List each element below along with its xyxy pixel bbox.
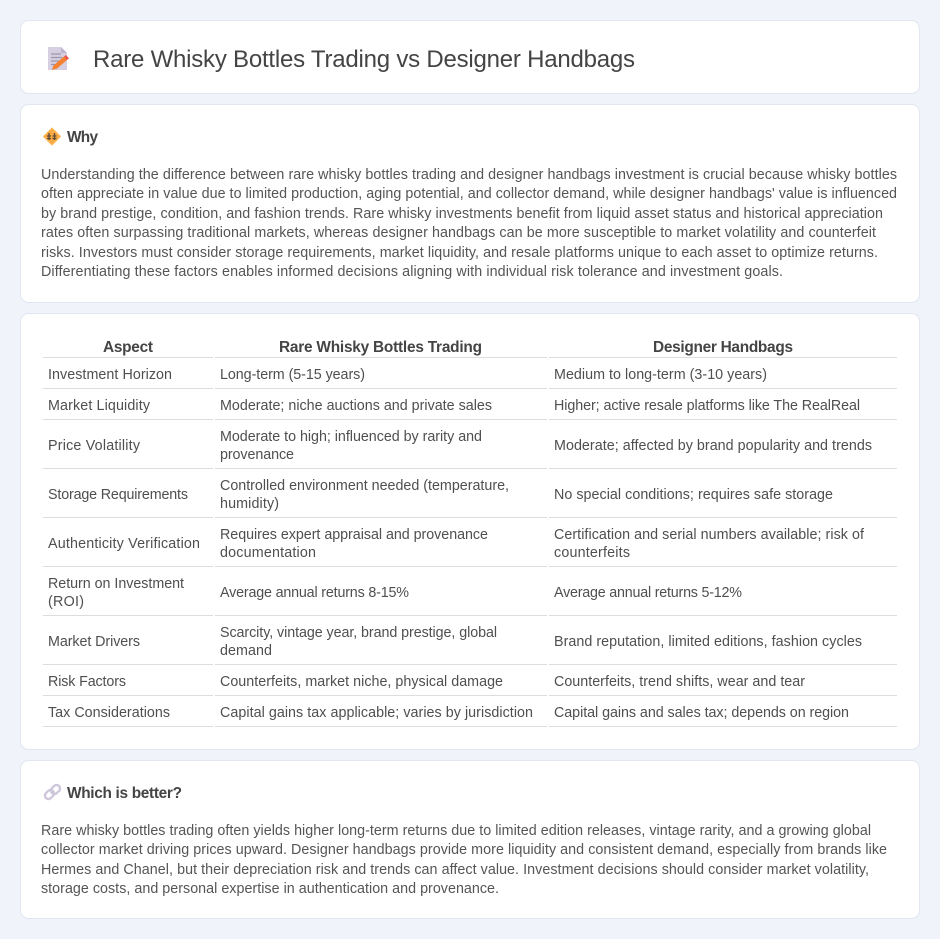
- icon: chain link: [43, 783, 62, 801]
- row: price volatility: Price Volatility: [48, 438, 141, 454]
- panel: comparison table: [20, 314, 920, 750]
- row: return on investment: [43, 576, 897, 616]
- row: market drivers: Brand reputation, limited editions, fashion cycles: [554, 634, 862, 650]
- icon: warning diamond: [44, 128, 60, 145]
- row: risk factors: Counterfeits, market niche, physical damage: [220, 674, 503, 690]
- heading: which is better: Which is better?: [67, 785, 182, 802]
- row: investment horizon: [43, 367, 897, 389]
- row: tax considerations: Capital gains and sales tax; depends on region: [554, 705, 849, 721]
- row: storage requirements: [43, 478, 897, 518]
- text block: why explanation: Understanding the difference between rare whisky bottles trading and designer handbags investment is crucial because whisky bottles: [41, 167, 897, 183]
- text block: verdict: [41, 823, 887, 897]
- row: market liquidity: Market Liquidity: [48, 398, 151, 414]
- row: authenticity verification: Authenticity Verification: [48, 536, 200, 552]
- table header row: Designer Handbags: [653, 339, 793, 356]
- heading: why: Why: [67, 129, 98, 146]
- text block: why explanation: rates often surpassing traditional markets, whereas designer handbags can be more susceptible to market volatility and counterfeit: [41, 225, 876, 241]
- panel: title header: [20, 20, 920, 94]
- row: authenticity verification: documentation: [220, 545, 316, 561]
- row: authenticity verification: [43, 527, 897, 567]
- row: tax considerations: Capital gains tax applicable; varies by jurisdiction: [220, 705, 533, 721]
- row: market liquidity: Higher; active resale platforms like The RealReal: [554, 398, 860, 414]
- table header row: Aspect: [103, 339, 153, 356]
- row: return on investment: (ROI): [48, 594, 84, 610]
- text block: verdict: collector market driving prices upward. Designer handbags provide more liquidity and consistent demand, especially from brands like: [41, 842, 887, 858]
- row: storage requirements: Storage Requirements: [48, 487, 188, 503]
- text block: why explanation: [41, 167, 897, 280]
- text block: why explanation: risks. Investors must consider storage requirements, market liquidity, and resale platforms unique to each asset to optimize returns.: [41, 245, 878, 261]
- table header row: Rare Whisky Bottles Trading: [279, 339, 482, 356]
- row: investment horizon: Long-term (5-15 years): [220, 367, 365, 383]
- icon: memo with pencil: [48, 47, 69, 70]
- row: storage requirements: humidity): [220, 496, 279, 512]
- row: market drivers: Market Drivers: [48, 634, 140, 650]
- row: market liquidity: [43, 398, 897, 420]
- row: storage requirements: Controlled environment needed (temperature,: [220, 478, 509, 494]
- row: price volatility: Moderate to high; influenced by rarity and: [220, 429, 482, 445]
- text block: verdict: Hermes and Chanel, but their depreciation risk and trends can affect value. Investment decisions should consider market volatility,: [41, 862, 869, 878]
- row: market liquidity: Moderate; niche auctions and private sales: [220, 398, 492, 414]
- text block: why explanation: often appreciate in value due to limited production, aging potential, and collector demand, while designer handbags' value is influenced: [41, 186, 897, 202]
- row: authenticity verification: counterfeits: [554, 545, 630, 561]
- row: investment horizon: Investment Horizon: [48, 367, 172, 383]
- row: price volatility: Moderate; affected by brand popularity and trends: [554, 438, 872, 454]
- row: return on investment: Average annual returns 8-15%: [220, 585, 409, 601]
- row: risk factors: Counterfeits, trend shifts, wear and tear: [554, 674, 805, 690]
- row: market drivers: Scarcity, vintage year, brand prestige, global: [220, 625, 497, 641]
- row: risk factors: Risk Factors: [48, 674, 126, 690]
- row: price volatility: [43, 429, 897, 469]
- panel: which is better: [20, 760, 920, 918]
- text block: why explanation: by brand prestige, condition, and fashion trends. Rare whisky investments benefit from liquid asset status and historical appreciation: [41, 206, 883, 222]
- row: tax considerations: Tax Considerations: [48, 705, 170, 721]
- panel: why: [20, 104, 920, 302]
- row: storage requirements: No special conditions; requires safe storage: [554, 487, 833, 503]
- text block: verdict: Rare whisky bottles trading often yields higher long-term returns due to limited edition releases, vintage rarity, and a growing global: [41, 823, 871, 839]
- text block: why explanation: Differentiating these factors enables informed decisions aligning with individual risk tolerance and investment goals.: [41, 264, 783, 280]
- row: market drivers: [43, 625, 897, 665]
- row: market drivers: demand: [220, 643, 272, 659]
- row: authenticity verification: Certification and serial numbers available; risk of: [554, 527, 864, 543]
- row: return on investment: Return on Investment: [48, 576, 184, 592]
- row: price volatility: provenance: [220, 447, 294, 463]
- text block: verdict: storage costs, and personal expertise in authentication and provenance.: [41, 881, 499, 897]
- row: investment horizon: Medium to long-term (3-10 years): [554, 367, 767, 383]
- row: authenticity verification: Requires expert appraisal and provenance: [220, 527, 488, 543]
- table header row: [43, 339, 897, 358]
- row: tax considerations: [43, 705, 897, 727]
- row: risk factors: [43, 674, 897, 696]
- row: return on investment: Average annual returns 5-12%: [554, 585, 742, 601]
- title: Rare Whisky Bottles Trading vs Designer Handbags: [93, 46, 635, 73]
